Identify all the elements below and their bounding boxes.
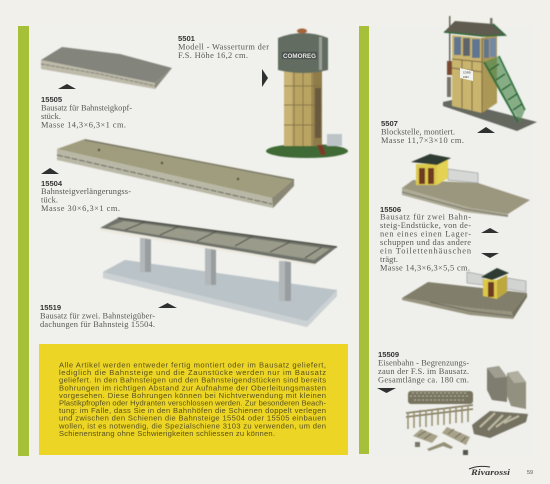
- signal box sign: CORSI: [463, 72, 471, 74]
- label: 15504: Bahnsteigverlängerungss-: [41, 187, 131, 196]
- left green bar: [18, 26, 29, 456]
- label: 15505: 15505: [41, 95, 63, 104]
- yellow info box: Schienenstrang ohne Schwierigkeiten schliessen zu können.: [59, 429, 275, 438]
- yellow info box: geliefert. In den Bahnsteigen und den Bahnsteigendstücken sind bereits: [59, 376, 326, 385]
- platform end model with shed: [402, 154, 530, 217]
- label: 15509: Gesamtlänge ca. 180 cm.: [378, 376, 469, 384]
- label: 15505: [41, 95, 132, 129]
- label: 15505: stück.: [41, 112, 61, 121]
- label: 5507: Masse 11,7×3×10 cm.: [381, 136, 464, 145]
- yellow info box: [39, 344, 348, 455]
- logo: Rivarossi: Rivarossi: [470, 467, 511, 477]
- label: 15506: Bausatz für zwei Bahn-: [380, 212, 471, 222]
- label: 15504: 15504: [41, 179, 63, 188]
- label: 5501: F.S. Höhe 16,2 cm.: [178, 51, 248, 60]
- label: 15506: trägt.: [380, 255, 398, 264]
- arrow: 15519: [158, 303, 177, 308]
- water tower lettering: COMOREG: [283, 53, 316, 60]
- label: 5501: [178, 34, 269, 60]
- label: 15505: Masse 14,3×6,3×1 cm.: [41, 120, 126, 129]
- label: 15519: dachungen für Bahnsteig 15504.: [40, 320, 155, 329]
- yellow info box: vorgesehen. Diese Bohrungen können bei Nichtverwendung mit kleinen: [59, 391, 326, 400]
- label: 5501: Modell - Wasserturm der: [178, 42, 269, 52]
- label: 15506: steig-Endstücke, von de-: [380, 221, 471, 230]
- yellow info box: Alle Artikel werden entweder fertig montiert oder im Bausatz geliefert,: [59, 360, 326, 370]
- arrow: 15506 up: [481, 228, 499, 233]
- label: 15505: Bausatz für Bahnsteigkopf-: [41, 104, 132, 113]
- label: 15509: zaun der F.S. im Bausatz.: [378, 367, 469, 376]
- platform model 15504: [57, 139, 294, 208]
- label: 15509: [378, 350, 469, 384]
- yellow info box: wollen, ist es notwendig, die Spezialschiene 3103 zu verwenden, um den: [58, 421, 326, 430]
- label: 15519: [40, 303, 155, 329]
- label: 15506: ein Toilettenhäuschen: [380, 246, 472, 256]
- label: 15519: Bausatz für zwei. Bahnsteigüber-: [40, 312, 155, 320]
- arrow: 5501: [262, 69, 268, 87]
- label: 5507: Blockstelle, montiert.: [381, 128, 455, 136]
- arrow: 15509: [377, 388, 396, 393]
- arrow: 15504: [41, 168, 59, 174]
- label: 5507: [381, 119, 464, 145]
- label: 15509: 15509: [378, 350, 399, 359]
- platform roof model 15519: [100, 218, 337, 327]
- page number: 59: [527, 470, 533, 476]
- label: 5507: 5507: [381, 119, 398, 128]
- arrow: 15505: [58, 84, 76, 89]
- label: 15504: Masse 30×6,3×1 cm.: [41, 204, 120, 213]
- right green bar: [359, 26, 369, 454]
- yellow info box: und zwischen den Schienen die Bahnsteige 15504 oder 15505 einbauen: [59, 414, 326, 423]
- label: 5501: 5501: [178, 34, 196, 43]
- arrow: 5507: [477, 127, 495, 133]
- label: 15504: tück.: [41, 195, 58, 204]
- arrow: 15506 down: [481, 253, 499, 258]
- signal box sign: [460, 68, 473, 81]
- signal box model 5507: [443, 16, 537, 131]
- platform end model with toilet hut: [402, 268, 527, 319]
- label: 15506: 15506: [380, 205, 401, 214]
- label: 15506: nen eines einen Lager-: [380, 230, 471, 238]
- yellow info box: tung: im Falle, dass Sie in den Bahnhöfen die Schienen doppelt verlegen: [59, 406, 326, 415]
- label: 15506: [380, 205, 472, 272]
- label: 15506: Masse 14,3×6,3×5,5 cm.: [380, 264, 470, 272]
- fence kit parts model: [406, 366, 528, 455]
- label: 15509: Eisenbahn - Begrenzungs-: [378, 358, 469, 368]
- label: 15506: schuppen und das andere: [380, 238, 471, 247]
- yellow info box: lediglich die Bahnsteige und die Zaunstücke werden nur im Bausatz: [59, 368, 326, 377]
- signal box sign: 1964: [463, 76, 469, 79]
- water tower model: [266, 28, 348, 158]
- platform model 15505: [41, 47, 172, 89]
- label: 15519: 15519: [40, 303, 61, 312]
- yellow info box: Plastikpfropfen oder Hydranten verschlossen werden. Zur besonderen Beach-: [59, 398, 326, 408]
- yellow info box: Bohrungen im richtigen Abstand zur Aufnahme der Oberleitungsmasten: [59, 383, 326, 392]
- label: 15504: [41, 179, 131, 213]
